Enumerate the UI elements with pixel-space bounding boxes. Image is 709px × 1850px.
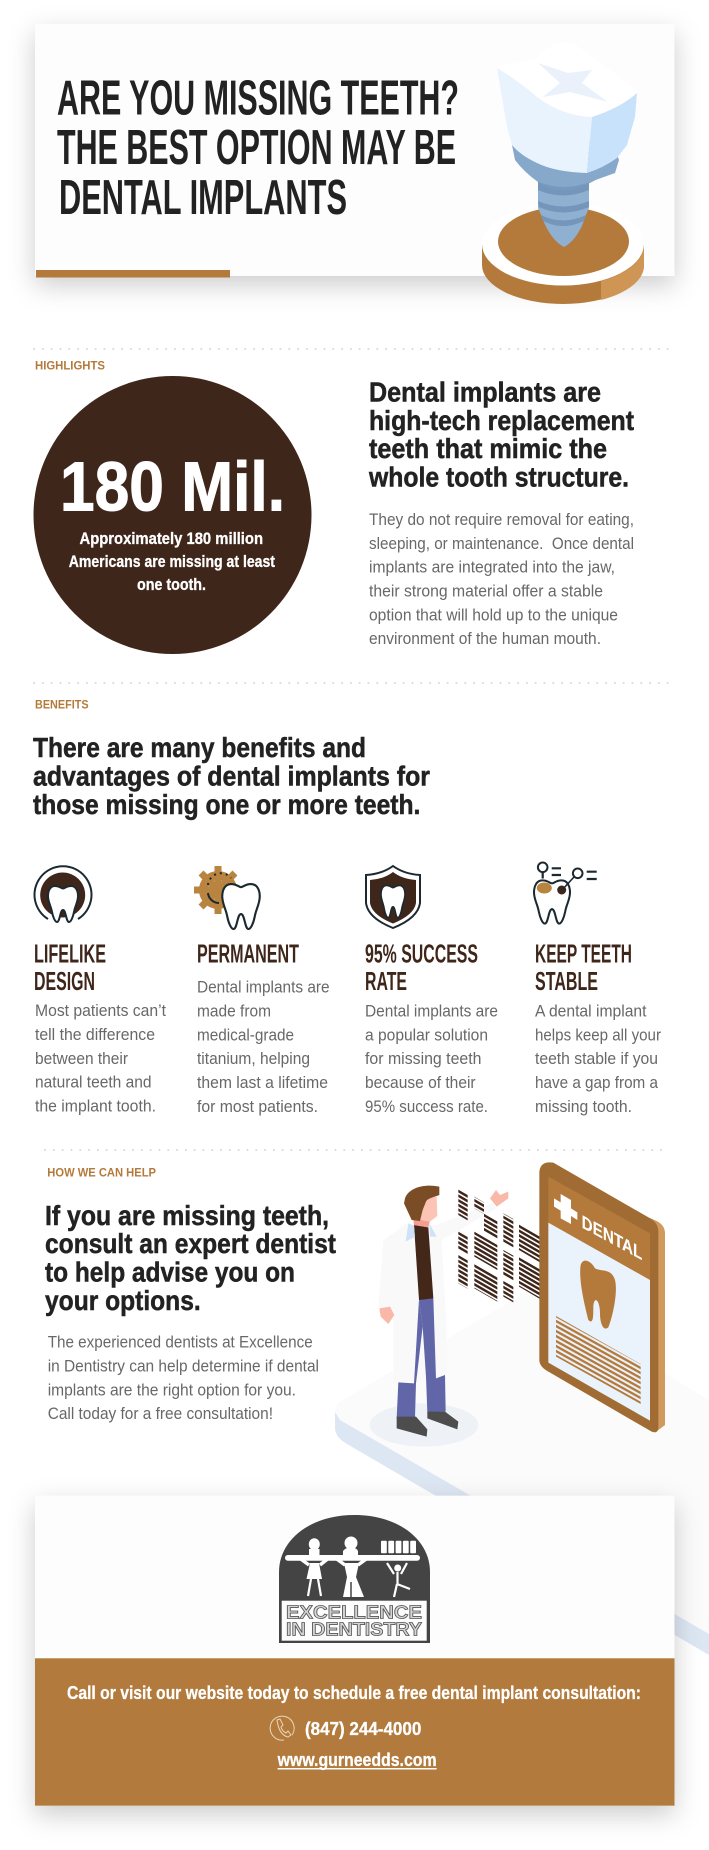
text block: consultation: implants are the right option for you. <box>48 1381 296 1400</box>
panel: footer card <box>35 1496 674 1806</box>
title: THE BEST OPTION MAY BE <box>57 120 456 175</box>
logo: Excellence in Dentistry <box>279 1515 430 1643</box>
card text: helps keep all your <box>535 1026 661 1045</box>
heading: dental implants <box>368 377 634 493</box>
stat caption: Approximately 180 million <box>80 530 263 548</box>
card text <box>35 1001 166 1116</box>
section label: how we can help: HOW WE CAN HELP <box>47 1168 156 1180</box>
dental board <box>539 1162 665 1433</box>
card text: because of their <box>365 1073 476 1092</box>
heading: dental implants: whole tooth structure. <box>368 462 629 493</box>
card title: PERMANENT <box>197 939 299 969</box>
card text: 95% success rate. <box>365 1097 488 1116</box>
stat caption <box>69 530 275 594</box>
icon: tooth with probes <box>534 862 597 924</box>
logo wordmark: EXCELLENCE <box>286 1602 422 1622</box>
section label: benefits: BENEFITS <box>35 700 89 712</box>
panel: header card <box>35 24 674 278</box>
text block: implant description: environment of the human mouth. <box>369 629 601 648</box>
phone number: (847) 244-4000 <box>305 1718 421 1739</box>
card title: STABLE <box>535 966 598 996</box>
text block: consultation: The experienced dentists at Excellence <box>48 1333 313 1352</box>
text block: implant description: option that will hold up to the unique <box>369 606 618 625</box>
card text <box>535 1002 661 1116</box>
heading: consult a dentist: If you are missing teeth, <box>45 1200 329 1231</box>
title: DENTAL IMPLANTS <box>59 170 347 225</box>
card title: RATE <box>365 966 407 996</box>
card text: them last a lifetime <box>197 1073 328 1092</box>
stat caption: one tooth. <box>137 576 206 594</box>
divider: how we can help <box>45 1149 668 1151</box>
title: ARE YOU MISSING TEETH? <box>57 70 459 126</box>
card title: DESIGN <box>34 966 95 996</box>
icon: dental implant illustration <box>482 43 644 304</box>
logo wordmark <box>286 1602 422 1640</box>
card text: teeth stable if you <box>535 1049 658 1068</box>
text block: implant description <box>369 510 634 648</box>
heading: consult a dentist <box>45 1200 336 1316</box>
panel: lifelike design <box>34 866 166 1116</box>
heading: benefits: There are many benefits and <box>33 732 366 763</box>
card title <box>34 939 106 996</box>
heading: dental implants: teeth that mimic the <box>369 433 607 464</box>
card text: titanium, helping <box>197 1049 310 1068</box>
panel: success rate <box>365 866 498 1116</box>
heading: benefits <box>33 732 430 820</box>
text block: consultation <box>48 1333 319 1423</box>
dentist figure <box>370 1186 508 1447</box>
heading: benefits: advantages of dental implants for <box>33 761 430 792</box>
card title <box>365 939 478 996</box>
card text: between their <box>35 1049 128 1068</box>
title <box>57 70 459 225</box>
contact band <box>35 1658 674 1806</box>
card title: KEEP TEETH <box>535 939 632 969</box>
card text: natural teeth and <box>35 1072 152 1092</box>
card text: for most patients. <box>197 1097 318 1116</box>
card text: Dental implants are <box>197 978 330 997</box>
icon: phone <box>270 1716 294 1740</box>
logo wordmark: IN DENTISTRY <box>286 1620 422 1640</box>
card text: Dental implants are <box>365 1002 498 1021</box>
website: www.gurneedds.com <box>277 1749 437 1770</box>
panel: keep teeth stable <box>534 862 661 1116</box>
card text <box>365 1002 498 1116</box>
panel: permanent <box>194 866 330 1116</box>
illustration: isometric platform <box>335 1291 709 1655</box>
text block: consultation: Call today for a free consultation! <box>48 1404 273 1423</box>
stat caption: Americans are missing at least <box>69 553 275 571</box>
floating text lines <box>458 1188 540 1302</box>
section label: highlights: HIGHLIGHTS <box>35 360 105 372</box>
text block: implant description: their strong material offer a stable <box>369 582 603 601</box>
text block: consultation: in Dentistry can help determine if dental <box>48 1357 319 1376</box>
icon: shield with tooth <box>366 866 420 928</box>
dental board: DENTAL <box>582 1211 642 1265</box>
big number: 180 Mil. <box>60 448 285 526</box>
divider: benefits <box>34 682 676 684</box>
heading: dental implants: high-tech replacement <box>369 405 634 436</box>
heading: consult a dentist: consult an expert dentist <box>45 1228 336 1259</box>
divider: highlights <box>34 348 676 350</box>
card text: for missing teeth <box>365 1049 482 1068</box>
card text: a popular solution <box>365 1026 488 1045</box>
text block: implant description: sleeping, or maintenance. Once dental <box>369 534 634 553</box>
heading: consult a dentist: your options. <box>45 1285 201 1316</box>
card text: missing tooth. <box>535 1097 632 1116</box>
heading: dental implants: Dental implants are <box>369 377 601 408</box>
card text: medical-grade <box>197 1026 294 1045</box>
card text: the implant tooth. <box>35 1097 156 1116</box>
card text: have a gap from a <box>535 1073 658 1092</box>
heading: consult a dentist: to help advise you on <box>45 1257 295 1288</box>
heading: benefits: those missing one or more teeth. <box>33 789 420 820</box>
text block: implant description: implants are integrated into the jaw, <box>369 558 615 577</box>
text block: implant description: They do not require removal for eating, <box>369 510 634 529</box>
panel: 180 million stat circle <box>34 376 312 654</box>
card text: A dental implant <box>535 1002 647 1021</box>
card text <box>197 978 330 1116</box>
card text: tell the difference <box>35 1025 155 1044</box>
card text: made from <box>197 1002 271 1021</box>
card text: Most patients can’t <box>35 1001 166 1020</box>
illustration: dentist and dental board <box>370 1162 665 1447</box>
icon: gear and tooth <box>194 866 260 929</box>
icon: tooth in arch <box>35 866 92 922</box>
accent bar <box>36 270 230 278</box>
card title: 95% SUCCESS <box>365 939 478 969</box>
card title <box>535 939 632 996</box>
card title: LIFELIKE <box>34 939 106 969</box>
